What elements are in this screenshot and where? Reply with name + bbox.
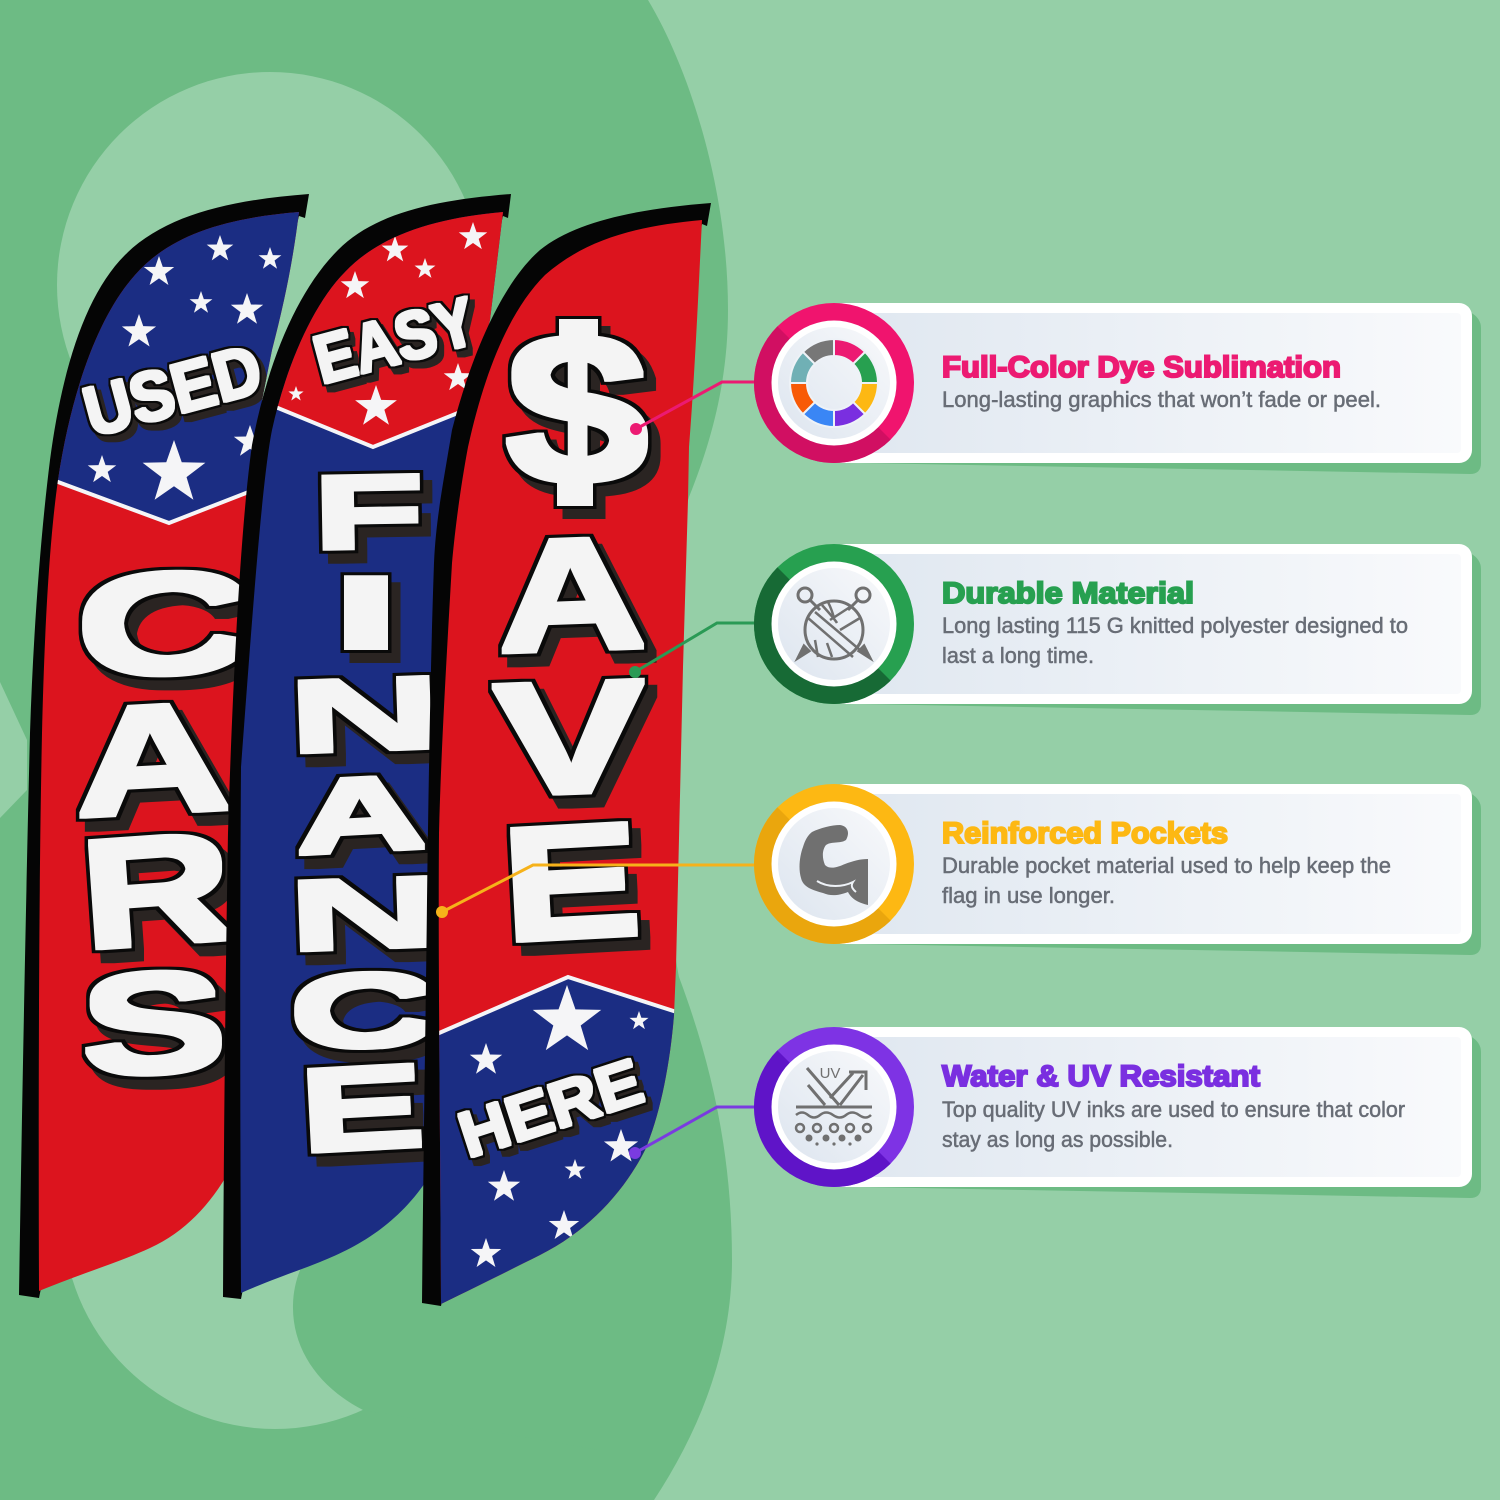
connector: water and uv [629, 1107, 760, 1159]
description: stay as long as possible. [942, 1127, 1173, 1152]
flag 2 large word: C [287, 951, 439, 1071]
description: Long-lasting graphics that won’t fade or peel. [942, 387, 1381, 412]
flag 1 small word: USED [76, 330, 270, 451]
title: Durable Material [942, 577, 1194, 610]
badge and icon: color wheel [754, 303, 914, 463]
flag 2 large word: I [329, 557, 403, 669]
panel: durable material [754, 544, 1481, 715]
description: flag in use longer. [942, 883, 1115, 908]
flag 2 small word: EASY [306, 283, 483, 398]
title: Reinforced Pockets [942, 817, 1228, 850]
flag 1 stars [88, 235, 281, 500]
flag 3 fabric [438, 220, 702, 1304]
flag 2 large word [290, 470, 432, 1167]
icon: uv protection [796, 1065, 872, 1146]
panel: full-color dye sublimation [754, 303, 1481, 474]
description: Top quality UV inks are used to ensure that color [942, 1097, 1405, 1122]
description [942, 853, 1391, 908]
card body [830, 303, 1481, 474]
description: last a long time. [942, 643, 1094, 668]
flag 2 pole sleeve [223, 194, 511, 1299]
flag 2 large word: N [286, 857, 444, 971]
description: Durable pocket material used to help keep the [942, 853, 1391, 878]
flag 1 pole sleeve [19, 194, 309, 1298]
card body [830, 784, 1481, 955]
flag 3 stars [470, 985, 649, 1267]
title: Water & UV Resistant [942, 1060, 1260, 1093]
flag 3 pole sleeve [422, 203, 711, 1306]
description [942, 613, 1408, 668]
flag 3 large word [492, 290, 649, 975]
badge [754, 784, 914, 944]
flag 2 fabric [240, 212, 503, 1293]
connector: durable [629, 623, 760, 678]
flag 1 large word: S [76, 941, 231, 1107]
flag 2 large word: E [296, 1040, 428, 1176]
description: Long lasting 115 G knitted polyester designed to [942, 613, 1408, 638]
connector: full-color [630, 382, 760, 435]
icon: flexed arm [800, 825, 868, 905]
connector: pockets [436, 865, 760, 918]
flag 1 large word [76, 566, 240, 1090]
badge [754, 1027, 914, 1187]
flag 1 large word: R [75, 800, 238, 981]
flag 2 large word: F [312, 454, 425, 570]
flag 3 large word: $ [505, 290, 649, 529]
flag 3 large word: E [498, 790, 645, 975]
panel: reinforced pockets [754, 784, 1481, 955]
flag 1 large word: C [71, 539, 258, 708]
flag: used cars [19, 194, 309, 1298]
description [942, 1097, 1405, 1152]
card body [830, 544, 1481, 715]
flag 3 small word: HERE [450, 1045, 651, 1171]
flag 2 large word: A [292, 754, 428, 876]
flag 1 large word: A [70, 671, 233, 849]
flag 1 fabric [38, 212, 299, 1291]
flag 3 large word: V [492, 647, 649, 829]
title: Full-Color Dye Sublimation [942, 351, 1341, 384]
flag 2 large word: N [286, 657, 444, 773]
flag: save here [422, 203, 711, 1306]
icon: uv protection: UV [820, 1065, 840, 1082]
badge and icon: yarn ball [754, 544, 914, 704]
card body [830, 1027, 1481, 1198]
panel: water and uv resistant [754, 1027, 1481, 1198]
flag 2 stars [288, 222, 487, 425]
flag: easy finance [223, 194, 511, 1299]
flag 3 large word: A [494, 504, 648, 685]
